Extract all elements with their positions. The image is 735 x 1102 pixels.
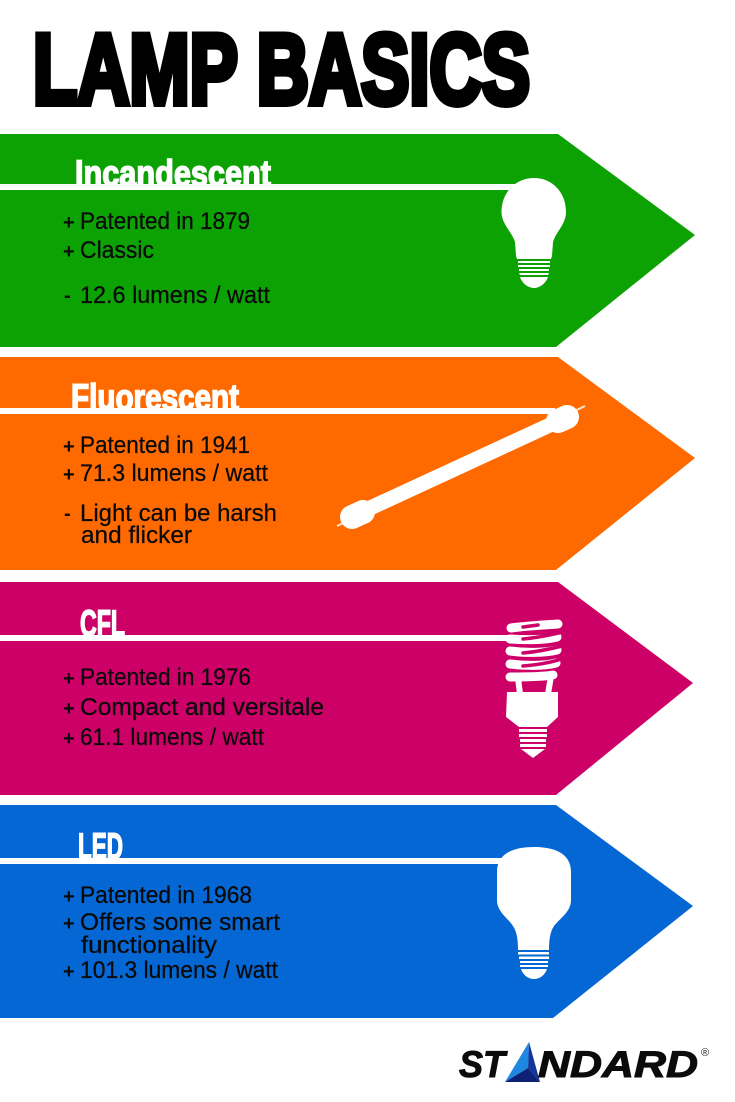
text block: fluorescent points: + (63, 436, 75, 458)
text block: incandescent points: Patented in 1879 (80, 208, 250, 235)
icon: incandescent bulb (502, 178, 566, 288)
panel: incandescent (0, 134, 695, 347)
text block: incandescent points: + (63, 241, 75, 263)
text block: incandescent points: - (64, 285, 71, 307)
text block: CFL points: Patented in 1976 (80, 664, 251, 691)
logo wordmark right: NDARD (538, 1044, 698, 1085)
registered mark: ® (701, 1047, 709, 1059)
panel: CFL (0, 582, 693, 795)
text block: CFL points: + (63, 698, 75, 720)
text block: LED points: + (63, 961, 75, 983)
text block: fluorescent points: - (64, 503, 71, 525)
text block: fluorescent points: + (63, 464, 75, 486)
heading: LED: LED (78, 826, 123, 867)
text block: fluorescent points: 71.3 lumens / watt (80, 460, 268, 487)
text block: fluorescent points (63, 432, 277, 549)
heading: incandescent: Incandescent (75, 153, 271, 194)
text block: incandescent points: + (63, 212, 75, 234)
panel: fluorescent (0, 357, 695, 570)
text block: LED points: + (63, 886, 75, 908)
text block: LED points: Patented in 1968 (80, 882, 252, 909)
text block: incandescent points: 12.6 lumens / watt (80, 282, 270, 309)
panel: LED (0, 805, 693, 1018)
icon: CFL spiral bulb (506, 624, 563, 758)
text block: LED points: 101.3 lumens / watt (80, 957, 278, 984)
icon: LED bulb (497, 847, 571, 979)
text block: fluorescent points: and flicker (81, 522, 192, 549)
text block: incandescent points: Classic (80, 237, 154, 264)
logo wordmark left: ST (459, 1044, 508, 1085)
text block: fluorescent points: Light can be harsh (80, 500, 277, 527)
text block: LED points: + (63, 913, 75, 935)
text block: fluorescent points: Patented in 1941 (80, 432, 250, 459)
logo: Standard (459, 1042, 709, 1085)
text block: CFL points: + (63, 728, 75, 750)
text block: CFL points: Compact and versitale (80, 694, 324, 721)
text block: incandescent points (63, 208, 270, 309)
title: LAMP BASICS (33, 14, 530, 124)
logo triangle mark (505, 1042, 540, 1082)
heading: CFL: CFL (80, 603, 125, 644)
heading: fluorescent: Fluorescent (71, 377, 239, 418)
text block: CFL points: 61.1 lumens / watt (80, 724, 264, 751)
icon: fluorescent tube (337, 406, 585, 526)
text block: CFL points: + (63, 668, 75, 690)
text block: LED points: Offers some smart (80, 909, 280, 936)
text block: LED points (63, 882, 280, 984)
text block: LED points: functionality (81, 932, 217, 959)
text block: CFL points (63, 664, 324, 751)
